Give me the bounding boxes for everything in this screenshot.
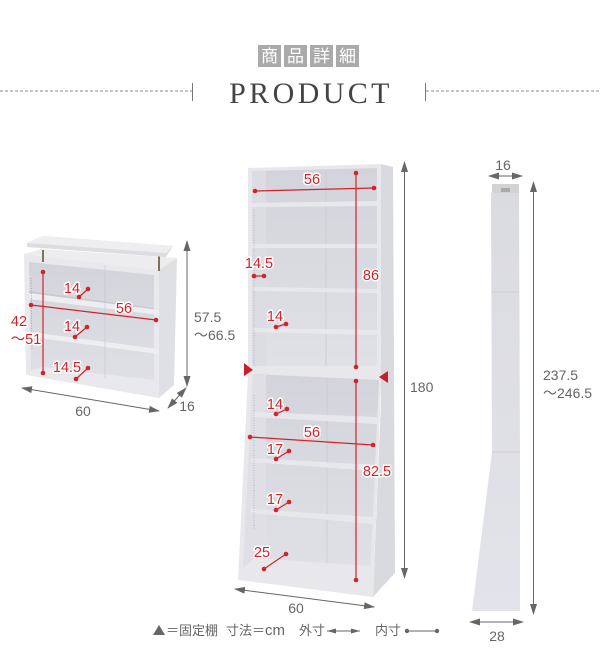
small unit red inner dimensions: 56 xyxy=(116,301,132,317)
small unit outer dimensions: ～66.5 xyxy=(194,327,235,343)
tall unit red inner dimensions: 82.5 xyxy=(363,464,391,480)
small unit red inner dimensions: ～51 xyxy=(11,332,41,348)
tall unit red inner dimensions: 86 xyxy=(363,268,379,284)
small unit red inner dimensions xyxy=(11,270,158,381)
side view: assembled unit with dimensions xyxy=(470,157,592,644)
shelves xyxy=(243,201,380,583)
tall unit red inner dimensions: 14.5 xyxy=(245,256,273,272)
tall unit red inner dimensions: 25 xyxy=(254,545,270,561)
small unit outer dimensions: 16 xyxy=(179,398,195,414)
tall unit red inner dimensions: 14 xyxy=(267,309,283,325)
tall unit red inner dimensions: 14 xyxy=(267,397,283,413)
header badge: 商品詳細: 詳 xyxy=(313,47,330,66)
small unit outer dimensions: 57.5 xyxy=(194,309,221,325)
tall unit red inner dimensions: 17 xyxy=(267,442,283,458)
legend: 内寸 xyxy=(375,623,401,638)
legend: 外寸 xyxy=(299,623,325,638)
tall unit red inner dimensions: 56 xyxy=(304,425,320,441)
side view outer dimensions: 28 xyxy=(489,628,505,644)
header badge: 商品詳細: 細 xyxy=(339,47,356,66)
header badge: 商品詳細: 商 xyxy=(261,47,278,66)
small unit outer dimensions xyxy=(22,241,235,419)
tall unit red inner dimensions: 56 xyxy=(304,172,320,188)
title: PRODUCT: PRODUCT xyxy=(229,77,393,110)
side view outer dimensions xyxy=(470,157,592,644)
header badge: 商品詳細 xyxy=(258,45,359,67)
legend xyxy=(153,622,439,639)
tall unit outer dimensions xyxy=(235,162,434,616)
tall unit red inner dimensions xyxy=(245,171,391,582)
side panel xyxy=(472,184,520,611)
tall unit: tall bookcase with dimensions xyxy=(235,162,434,616)
legend: ＝固定棚 xyxy=(166,623,218,638)
side view outer dimensions: ～246.5 xyxy=(543,385,592,401)
small unit red inner dimensions: 14 xyxy=(64,319,80,335)
tall unit cabinet xyxy=(238,164,395,597)
side view outer dimensions: 237.5 xyxy=(543,367,578,383)
tall unit red inner dimensions: 17 xyxy=(267,492,283,508)
small unit red inner dimensions: 42 xyxy=(11,314,27,330)
small unit red inner dimensions: 14.5 xyxy=(53,360,81,376)
small unit: short bookcase with dimensions xyxy=(11,236,235,419)
legend: 寸法＝cm xyxy=(226,622,285,639)
side view outer dimensions: 16 xyxy=(495,157,511,173)
tall unit outer dimensions: 180 xyxy=(410,379,434,395)
small unit outer dimensions: 60 xyxy=(75,403,91,419)
tall unit outer dimensions: 60 xyxy=(288,600,304,616)
fixed shelf markers xyxy=(244,363,388,383)
header badge: 商品詳細: 品 xyxy=(287,47,304,66)
small unit red inner dimensions: 14 xyxy=(64,281,80,297)
small unit cabinet xyxy=(24,236,177,398)
